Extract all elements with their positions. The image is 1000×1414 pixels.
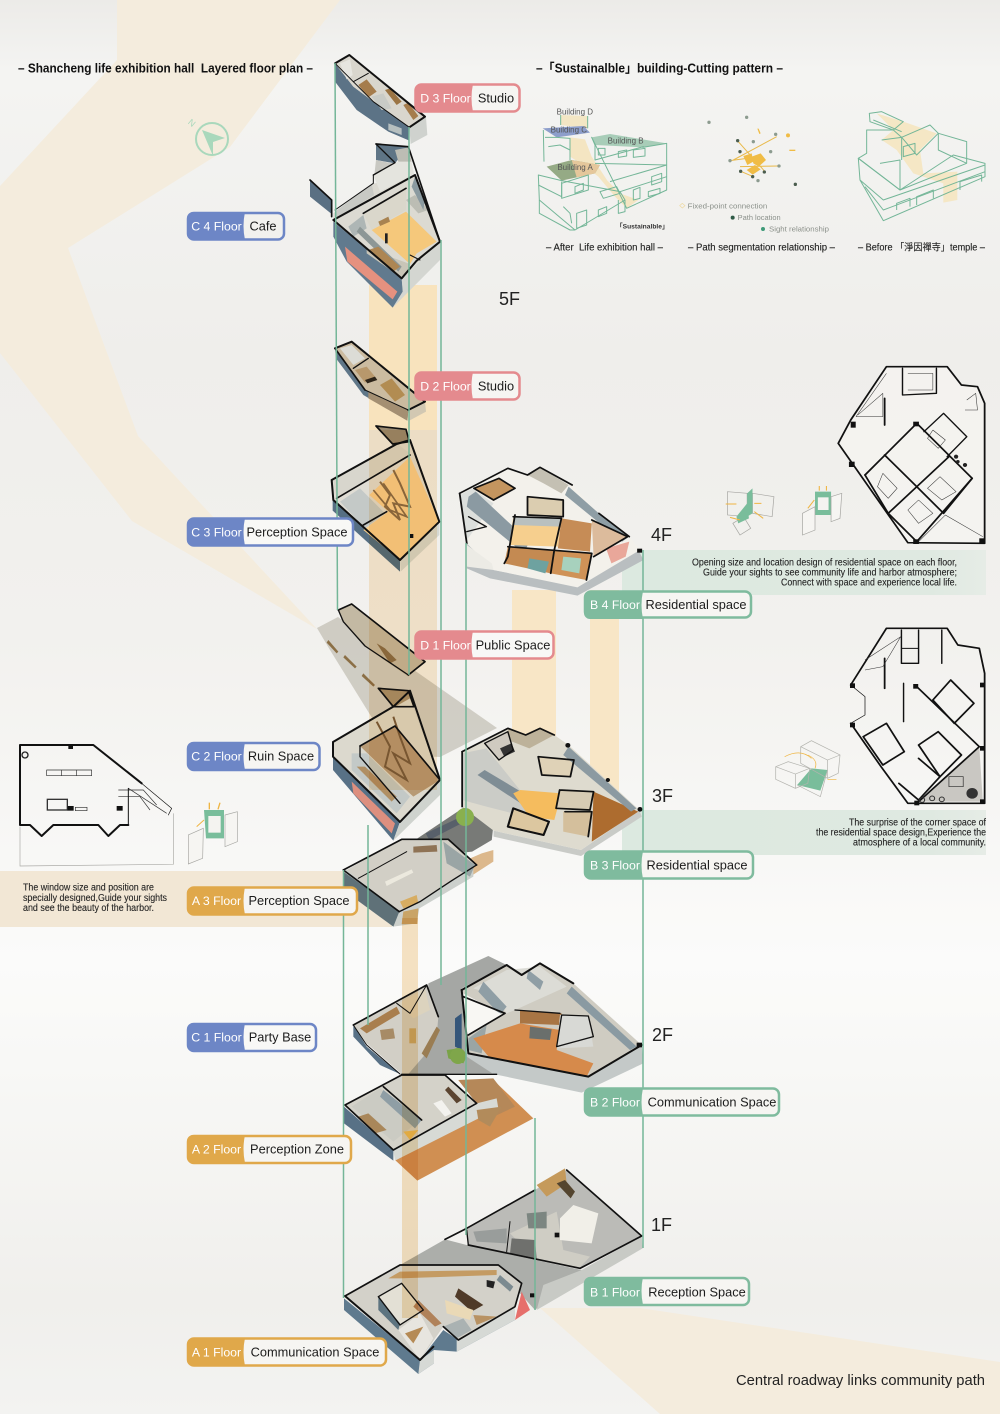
label: C 3 Floor: C 3 Floor (191, 526, 242, 540)
diagram: after, life exhibition hall: Building C (551, 126, 587, 135)
compass: N (186, 117, 198, 129)
legend: path segmentation (680, 201, 829, 233)
label: B 4 Floor (584, 591, 751, 619)
residential light column left (512, 590, 556, 810)
exhibition light column under (369, 285, 437, 430)
text: floor 3 corner space: atmosphere of a local community. (853, 838, 986, 848)
floor A 1 (344, 1265, 535, 1374)
diagram: before, temple (858, 112, 985, 221)
floor A 3 (343, 839, 493, 927)
diagram: after, life exhibition hall: Building A (557, 163, 594, 172)
text: A 3 window: The window size and position are (23, 882, 154, 894)
text: floor 3 corner space (816, 818, 986, 848)
floor B 2 (462, 963, 643, 1093)
floor C 4 (310, 144, 440, 308)
label: B 2 Floor (584, 1088, 779, 1116)
label: D 1 Floor (415, 631, 554, 659)
plant in central void (450, 1048, 466, 1064)
label: C 2 Floor: C 2 Floor (191, 750, 242, 764)
exhibition light column over floors (369, 430, 437, 790)
label: A 2 Floor: A 2 Floor (192, 1142, 241, 1156)
diagram: after, life exhibition hall: 「Sustainalble」 (616, 222, 669, 230)
label: C 2 Floor (187, 742, 320, 770)
small corner diagram: B 3 (776, 741, 840, 797)
label: A 1 Floor: A 1 Floor (192, 1346, 241, 1360)
main title: – Shancheng life exhibition hall Layered floor plan – (18, 62, 313, 76)
text: A 3 window: and see the beauty of the harbor. (23, 903, 154, 914)
label: C 1 Floor (187, 1023, 316, 1051)
diagram: path segmentation network (707, 116, 797, 186)
floor C 2 (333, 688, 440, 841)
label: D 2 Floor: Studio (478, 378, 514, 394)
floor C 3 (332, 426, 439, 572)
label: B 4 Floor: B 4 Floor (590, 598, 640, 612)
text: floor 4 residential openings: Guide your sights to see community life and harbor atmosphere; (703, 568, 957, 578)
label: D 3 Floor (415, 84, 520, 112)
label: A 2 Floor: Perception Zone (250, 1142, 344, 1156)
label: A 3 Floor (187, 887, 357, 915)
legend: path segmentation: Fixed-point connection (688, 201, 767, 210)
A floor light column (402, 918, 418, 1318)
label: B 1 Floor (584, 1277, 749, 1305)
label: D 1 Floor: Public Space (476, 638, 550, 652)
label: C 1 Floor: Party Base (249, 1030, 311, 1044)
label: D 2 Floor (415, 372, 520, 400)
label: D 3 Floor: Studio (478, 90, 514, 106)
diagram captions: – Path segmentation relationship – (688, 242, 836, 254)
label: B 1 Floor: Reception Space (648, 1284, 746, 1300)
floor A 2 (344, 1074, 533, 1181)
text: floor 4 residential openings: Connect with space and experience local life. (781, 578, 957, 588)
legend: path segmentation: Sight relationship (769, 224, 829, 233)
label: B 3 Floor: B 3 Floor (590, 858, 640, 872)
floor level 4F: 4F (651, 525, 672, 545)
gravel road below B 3 (415, 807, 494, 857)
shadow path between D1 and B3 (317, 617, 497, 757)
label: C 1 Floor: C 1 Floor (191, 1030, 242, 1044)
label: A 3 Floor: Perception Space (248, 893, 350, 908)
text: A 3 window: specially designed,Guide your sights (23, 893, 167, 904)
vertical connection lines (335, 63, 643, 1310)
label: A 3 Floor: A 3 Floor (192, 894, 241, 908)
floor D 1 (327, 604, 425, 687)
text bar: A 3 floor (0, 871, 392, 927)
text: floor 3 corner space: The surprise of the corner space of (849, 818, 986, 828)
diagram captions: – After Life exhibition hall – (546, 242, 664, 254)
floor level 2F: 2F (652, 1025, 673, 1045)
small window diagram: B 4 view one (726, 488, 774, 535)
label: D 3 Floor: D 3 Floor (420, 92, 471, 106)
floor level 1F: 1F (651, 1215, 672, 1235)
cutting pattern title: –「Sustainalble」building-Cutting pattern – (536, 62, 783, 76)
label: C 4 Floor: Cafe (249, 218, 277, 234)
text: floor 4 residential openings: Opening size and location design of residential space on each floor, (692, 558, 957, 568)
floor C 1 and central void (353, 956, 507, 1074)
label: A 1 Floor: Communication Space (251, 1344, 379, 1360)
small window diagram: A 3 floor (188, 803, 237, 864)
label: B 3 Floor (584, 851, 753, 879)
plan: A 3 floor (20, 745, 173, 866)
label: C 3 Floor: Perception Space (246, 524, 348, 540)
floor level 3F: 3F (652, 786, 673, 806)
residential light column right (590, 590, 619, 810)
text: A 3 window (23, 882, 167, 914)
text bar: floor 3 (622, 810, 986, 855)
label: C 3 Floor (187, 518, 353, 546)
cream roadway band bottom right (540, 1308, 1000, 1414)
text: floor 4 residential openings (692, 558, 957, 588)
label: A 2 Floor (187, 1135, 351, 1163)
diagram captions (546, 242, 986, 254)
label: D 2 Floor: D 2 Floor (420, 380, 471, 394)
floor level 5F: 5F (499, 289, 520, 309)
text bar: floor 4 (622, 550, 986, 595)
floor B 4 (460, 467, 644, 596)
caption: central roadway: Central roadway links community path (736, 1373, 985, 1389)
floor D 3 (335, 55, 427, 144)
label: D 1 Floor: D 1 Floor (420, 638, 471, 652)
compass (186, 117, 228, 156)
plant (456, 808, 474, 826)
cream roadway band upper left (0, 0, 340, 629)
legend: path segmentation: Path location (738, 213, 781, 222)
floor B 3 (462, 728, 642, 856)
plan: 4th floor (838, 367, 985, 544)
diagram: after, life exhibition hall: Building D (557, 108, 593, 117)
diagram: after, life exhibition hall: Building B (608, 136, 644, 145)
label: B 2 Floor: Communication Space (648, 1094, 776, 1110)
floor D 2 (335, 342, 426, 421)
small window diagram: B 4 view two (802, 486, 842, 535)
label: C 4 Floor (187, 212, 284, 240)
label: C 4 Floor: C 4 Floor (191, 220, 242, 234)
label: B 3 Floor: Residential space (646, 858, 748, 872)
diagram captions: – Before 「淨因禪寺」temple – (858, 242, 986, 254)
label: A 1 Floor (187, 1338, 386, 1366)
diagram: after, life exhibition hall (538, 108, 669, 230)
plan: 3rd floor (850, 628, 985, 805)
floor B 1 with roadway (400, 1168, 643, 1310)
label: B 4 Floor: Residential space (645, 597, 747, 612)
label: B 1 Floor: B 1 Floor (590, 1286, 640, 1300)
label: C 2 Floor: Ruin Space (248, 748, 314, 764)
label: B 2 Floor: B 2 Floor (590, 1096, 640, 1110)
